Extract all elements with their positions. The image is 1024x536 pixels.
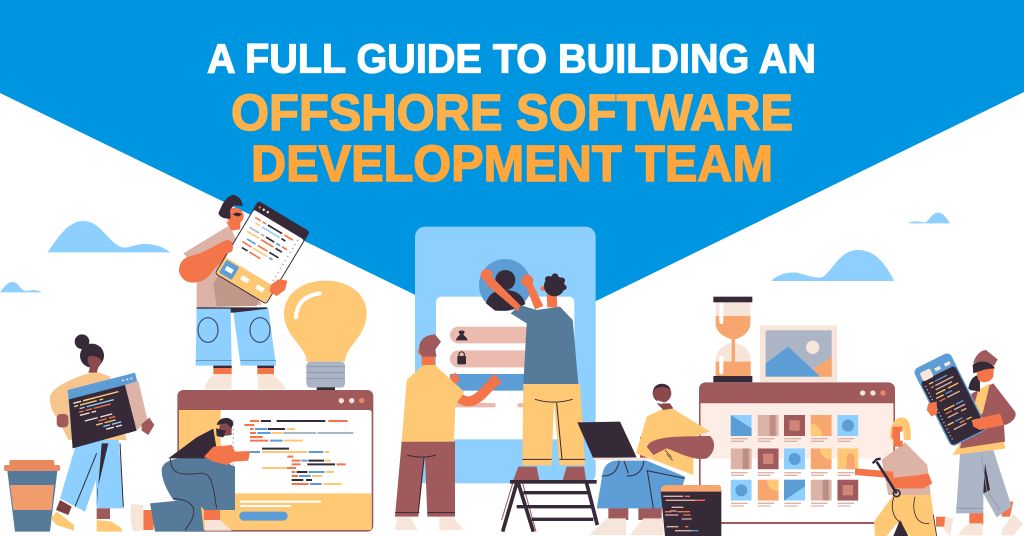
figure: seated man with laptop	[577, 384, 714, 535]
icon: large cloud left	[48, 221, 171, 252]
figure: woman holding code window	[50, 334, 154, 532]
figure: kneeling man	[130, 418, 250, 532]
panel: login screen	[415, 227, 596, 483]
icon: coffee cup	[4, 460, 60, 532]
figure: man on stool with avatar	[481, 269, 597, 532]
scene: right side objects	[699, 213, 950, 524]
icon: picture frame	[760, 325, 837, 382]
title	[207, 36, 816, 192]
figure: kneeling woman with wrench	[855, 417, 953, 536]
heading line 1: A FULL GUIDE TO BUILDING AN	[207, 36, 816, 82]
image tiles	[731, 415, 858, 506]
heading line 3: DEVELOPMENT TEAM	[251, 135, 773, 192]
icon: large cloud right	[771, 250, 894, 281]
scene: right side figures	[855, 350, 1023, 536]
scene: centre login panel and figures	[395, 227, 721, 536]
background: blue V-shaped banner	[0, 0, 1024, 342]
icon: user	[456, 331, 468, 340]
heading line 2: OFFSHORE SOFTWARE	[231, 84, 793, 141]
icon: padlock	[457, 352, 466, 364]
panel: gallery browser window	[699, 382, 895, 524]
avatar circle	[479, 259, 531, 311]
icon: hourglass	[713, 297, 752, 382]
figure: man holding tablet	[179, 195, 310, 389]
panel: code browser window	[177, 390, 373, 532]
icon: small cloud left	[0, 282, 42, 292]
icon: small cloud right	[908, 213, 950, 223]
code lines	[244, 421, 353, 484]
icon: light bulb	[284, 281, 367, 390]
stepladder	[502, 480, 597, 532]
figure: woman with phone	[913, 350, 1023, 535]
figure: man in yellow shirt	[395, 334, 502, 530]
panel: small code terminal	[661, 485, 721, 536]
wrench	[873, 459, 900, 497]
scene: left side illustrations	[0, 195, 373, 532]
